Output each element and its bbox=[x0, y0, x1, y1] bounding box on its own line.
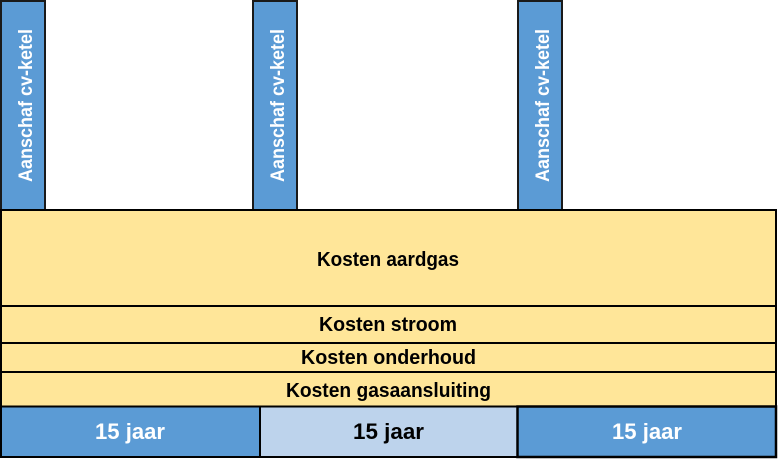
panel: natural gas costs bbox=[1, 210, 776, 306]
period 2: 15 years bbox=[260, 406, 518, 457]
panel: maintenance costs: Kosten onderhoud bbox=[301, 347, 476, 369]
boiler purchase bar 1: Aanschaf cv-ketel bbox=[16, 29, 37, 182]
period 2: 15 years: 15 jaar bbox=[353, 419, 424, 444]
period 3: 15 years: 15 jaar bbox=[612, 419, 682, 444]
boiler purchase bar 2 bbox=[253, 1, 297, 210]
boiler purchase bar 1 bbox=[1, 1, 45, 210]
panel: natural gas costs: Kosten aardgas bbox=[317, 249, 459, 271]
panel: maintenance costs bbox=[1, 343, 776, 372]
panel: gas connection costs: Kosten gasaansluiting bbox=[286, 380, 491, 402]
panel: electricity costs: Kosten stroom bbox=[319, 314, 457, 336]
period 1: 15 years bbox=[1, 406, 260, 457]
boiler purchase bar 3: Aanschaf cv-ketel bbox=[533, 29, 554, 182]
period 1: 15 years: 15 jaar bbox=[95, 419, 165, 444]
panel: electricity costs bbox=[1, 306, 776, 343]
panel: gas connection costs bbox=[1, 372, 776, 406]
period 3: 15 years bbox=[518, 406, 776, 457]
boiler purchase bar 3 bbox=[518, 1, 562, 210]
boiler purchase bar 2: Aanschaf cv-ketel bbox=[268, 29, 289, 182]
